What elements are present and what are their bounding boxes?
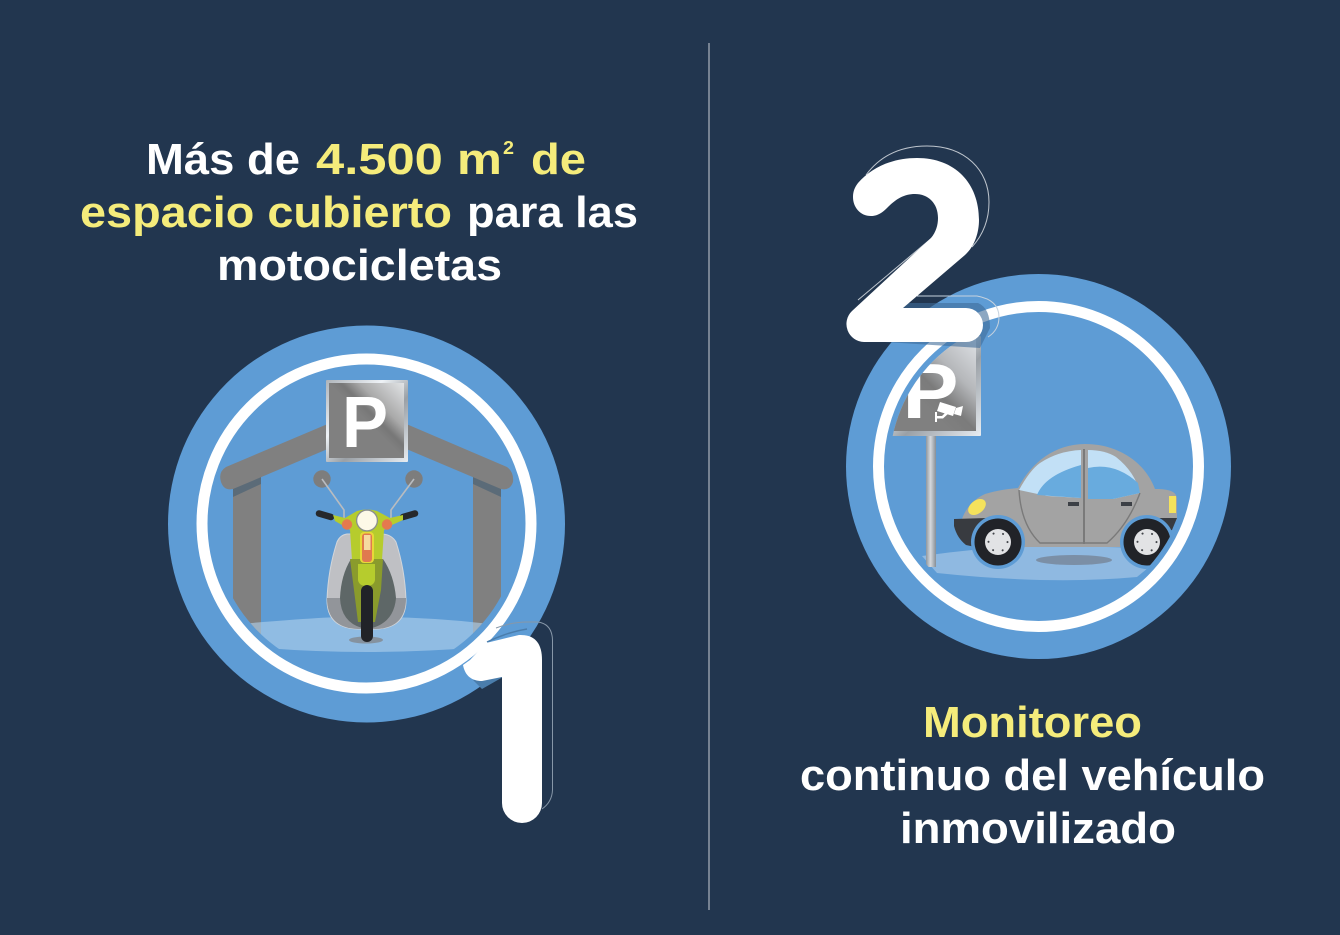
heading: covered space: Más de [146,135,300,184]
body [333,510,403,622]
heading: covered space: 2 [503,138,514,158]
number 1 [463,622,552,823]
heading: continuous monitoring: Monitoreo [923,698,1142,747]
outer blue circle [846,274,1231,659]
car [954,444,1177,569]
car shadow [1036,555,1112,565]
center divider [708,43,710,910]
headlight and indicators [342,510,392,531]
front wheel [971,515,1025,569]
rear wheel [1120,515,1174,569]
heading: continuous monitoring: continuo del vehículo [800,751,1265,800]
heading: covered space: para las [467,188,638,237]
door lines [1019,490,1140,543]
wheel shadow [349,636,383,644]
leg shield [327,534,406,629]
front panel [360,532,374,563]
tail light [1169,496,1176,513]
heading: covered space: motocicletas [217,241,502,290]
garage structure [220,423,513,650]
windows [1019,450,1140,499]
heading: continuous monitoring [800,698,1265,853]
handlebars [319,514,415,517]
white ring [878,306,1198,626]
outer blue circle [168,326,565,722]
heading: covered space: 4.500 m [316,135,502,184]
parking sign: P [342,383,388,463]
panel: motorcycle parking illustration [168,326,565,722]
front wheel [361,585,373,642]
heading: covered space: de [531,135,586,184]
parking sign [326,380,408,463]
heading: covered space: espacio cubierto [80,188,452,237]
camera parking sign [885,336,981,567]
white ring [202,359,531,688]
icon: security camera [935,402,963,422]
headlight [968,499,986,515]
number 2 [846,146,999,348]
panel: monitored car illustration [846,274,1231,659]
floor [240,617,490,652]
camera parking sign: P [902,347,958,435]
door handles [1068,502,1132,506]
car body [962,444,1177,547]
heading: continuous monitoring: inmovilizado [900,804,1176,853]
floor [922,547,1150,580]
mirrors [313,470,423,518]
scooter [313,470,423,644]
heading: covered space [80,135,638,290]
bumpers [954,518,987,547]
